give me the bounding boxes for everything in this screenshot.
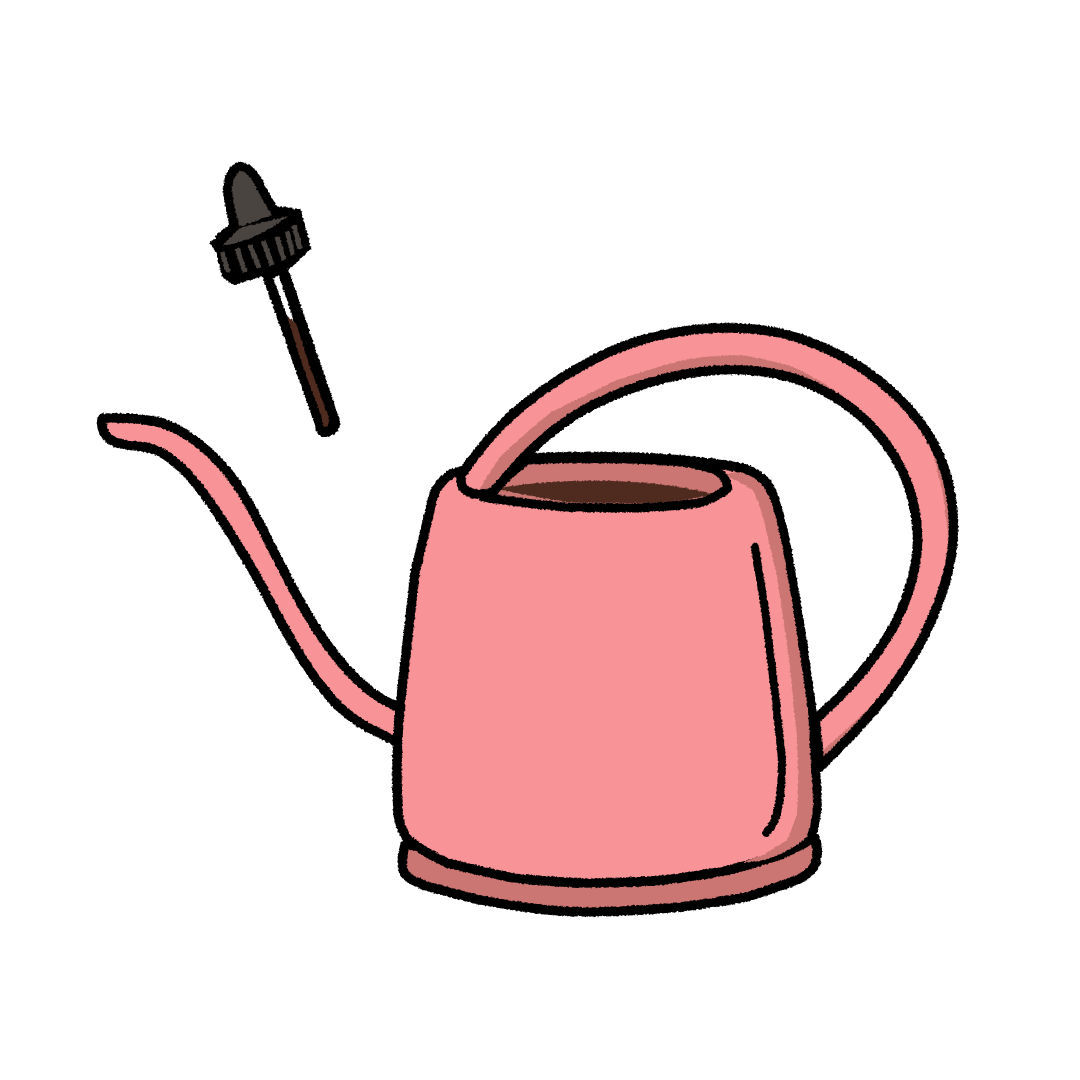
- dropper cap: [212, 211, 309, 283]
- icon: dropper: [212, 171, 340, 437]
- body shading: [723, 472, 813, 862]
- highlight stroke: [755, 547, 782, 833]
- handle shading: inner edge: [478, 355, 837, 492]
- icon: watering can: [102, 328, 953, 912]
- water surface: [498, 481, 712, 503]
- handle outline: [461, 328, 953, 767]
- handle shading: outer edge: [820, 445, 953, 767]
- base: [402, 838, 817, 912]
- handle: [461, 328, 953, 767]
- dropper bulb: [224, 171, 288, 240]
- spout: [102, 418, 402, 742]
- can body: [397, 457, 817, 883]
- dropper tube: [260, 262, 340, 437]
- can opening: [483, 459, 728, 508]
